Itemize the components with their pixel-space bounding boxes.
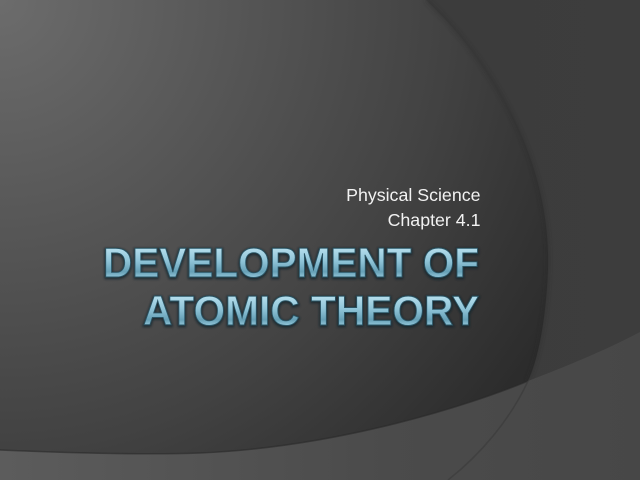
title — [103, 239, 479, 335]
background: bottom curved band — [0, 332, 640, 480]
subtitle: Chapter 4.1 — [388, 210, 481, 230]
title line 2: ATOMIC THEORY — [143, 287, 479, 334]
title shadow — [103, 240, 479, 335]
faint curve continuing over band — [448, 381, 528, 480]
title shadow: ATOMIC THEORY — [143, 288, 479, 335]
subtitle: Physical Science — [346, 185, 481, 205]
curved shadow edge — [426, 0, 548, 381]
title shadow: DEVELOPMENT OF — [103, 240, 479, 287]
title line 1: DEVELOPMENT OF — [103, 239, 479, 286]
subtitle — [346, 185, 481, 230]
